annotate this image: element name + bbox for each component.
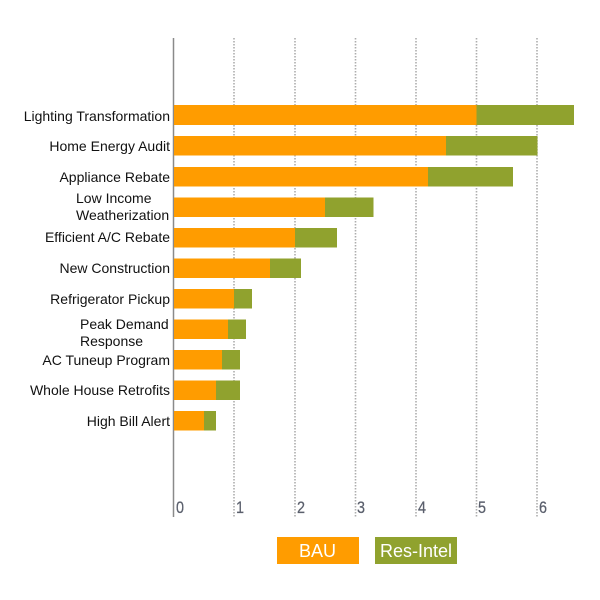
label: AC Tuneup Program: AC Tuneup Program: [42, 352, 170, 368]
bar: Home Energy Audit: [174, 136, 538, 156]
y axis line: [172, 38, 174, 517]
bar chart: [174, 105, 574, 430]
category labels: [24, 108, 170, 429]
bar: High Bill Alert: [174, 411, 216, 430]
label: Low Income Weatherization: Low Income: [76, 190, 152, 206]
bar: Appliance Rebate: [174, 167, 513, 186]
label: Low Income Weatherization: Weatherization: [76, 207, 169, 223]
bar: New Construction: [174, 258, 301, 278]
label: Appliance Rebate: Appliance Rebate: [59, 169, 170, 185]
x axis tick labels: 5: [478, 498, 486, 517]
label: Home Energy Audit: Home Energy Audit: [49, 138, 170, 154]
label: Refrigerator Pickup: Refrigerator Pickup: [50, 291, 170, 307]
legend: Res-Intel: [375, 537, 457, 564]
label: Efficient A/C Rebate: Efficient A/C Rebate: [45, 229, 170, 245]
label: New Construction: New Construction: [60, 260, 170, 276]
label: Peak Demand Response: [80, 316, 169, 349]
bar: Whole House Retrofits: [174, 380, 240, 400]
label: Whole House Retrofits: Whole House Retrofits: [30, 382, 170, 398]
label: Lighting Transformation: Lighting Transformation: [24, 108, 170, 124]
bar: Refrigerator Pickup: [174, 289, 252, 308]
label: Peak Demand Response: Peak Demand: [80, 316, 169, 332]
label: Low Income Weatherization: [76, 190, 169, 223]
x axis tick labels: 0: [176, 498, 184, 517]
x axis tick labels: 4: [418, 498, 426, 517]
legend: BAU: [277, 537, 359, 564]
x axis tick labels: 2: [297, 498, 305, 517]
x axis tick labels: [176, 498, 547, 517]
legend: Res-Intel: Res-Intel: [380, 541, 452, 561]
label: Peak Demand Response: Response: [80, 333, 143, 349]
legend: [277, 537, 457, 564]
label: High Bill Alert: High Bill Alert: [87, 413, 170, 429]
x axis tick labels: 1: [236, 498, 244, 517]
x axis tick labels: 3: [357, 498, 365, 517]
x axis tick labels: 6: [539, 498, 547, 517]
bar: Efficient A/C Rebate: [174, 228, 337, 248]
legend: BAU: BAU: [299, 541, 336, 561]
bar: Peak Demand Response: [174, 320, 246, 339]
bar: Low Income Weatherization: [174, 198, 374, 217]
bar: AC Tuneup Program: [174, 350, 240, 370]
bar: Lighting Transformation: [174, 105, 574, 125]
